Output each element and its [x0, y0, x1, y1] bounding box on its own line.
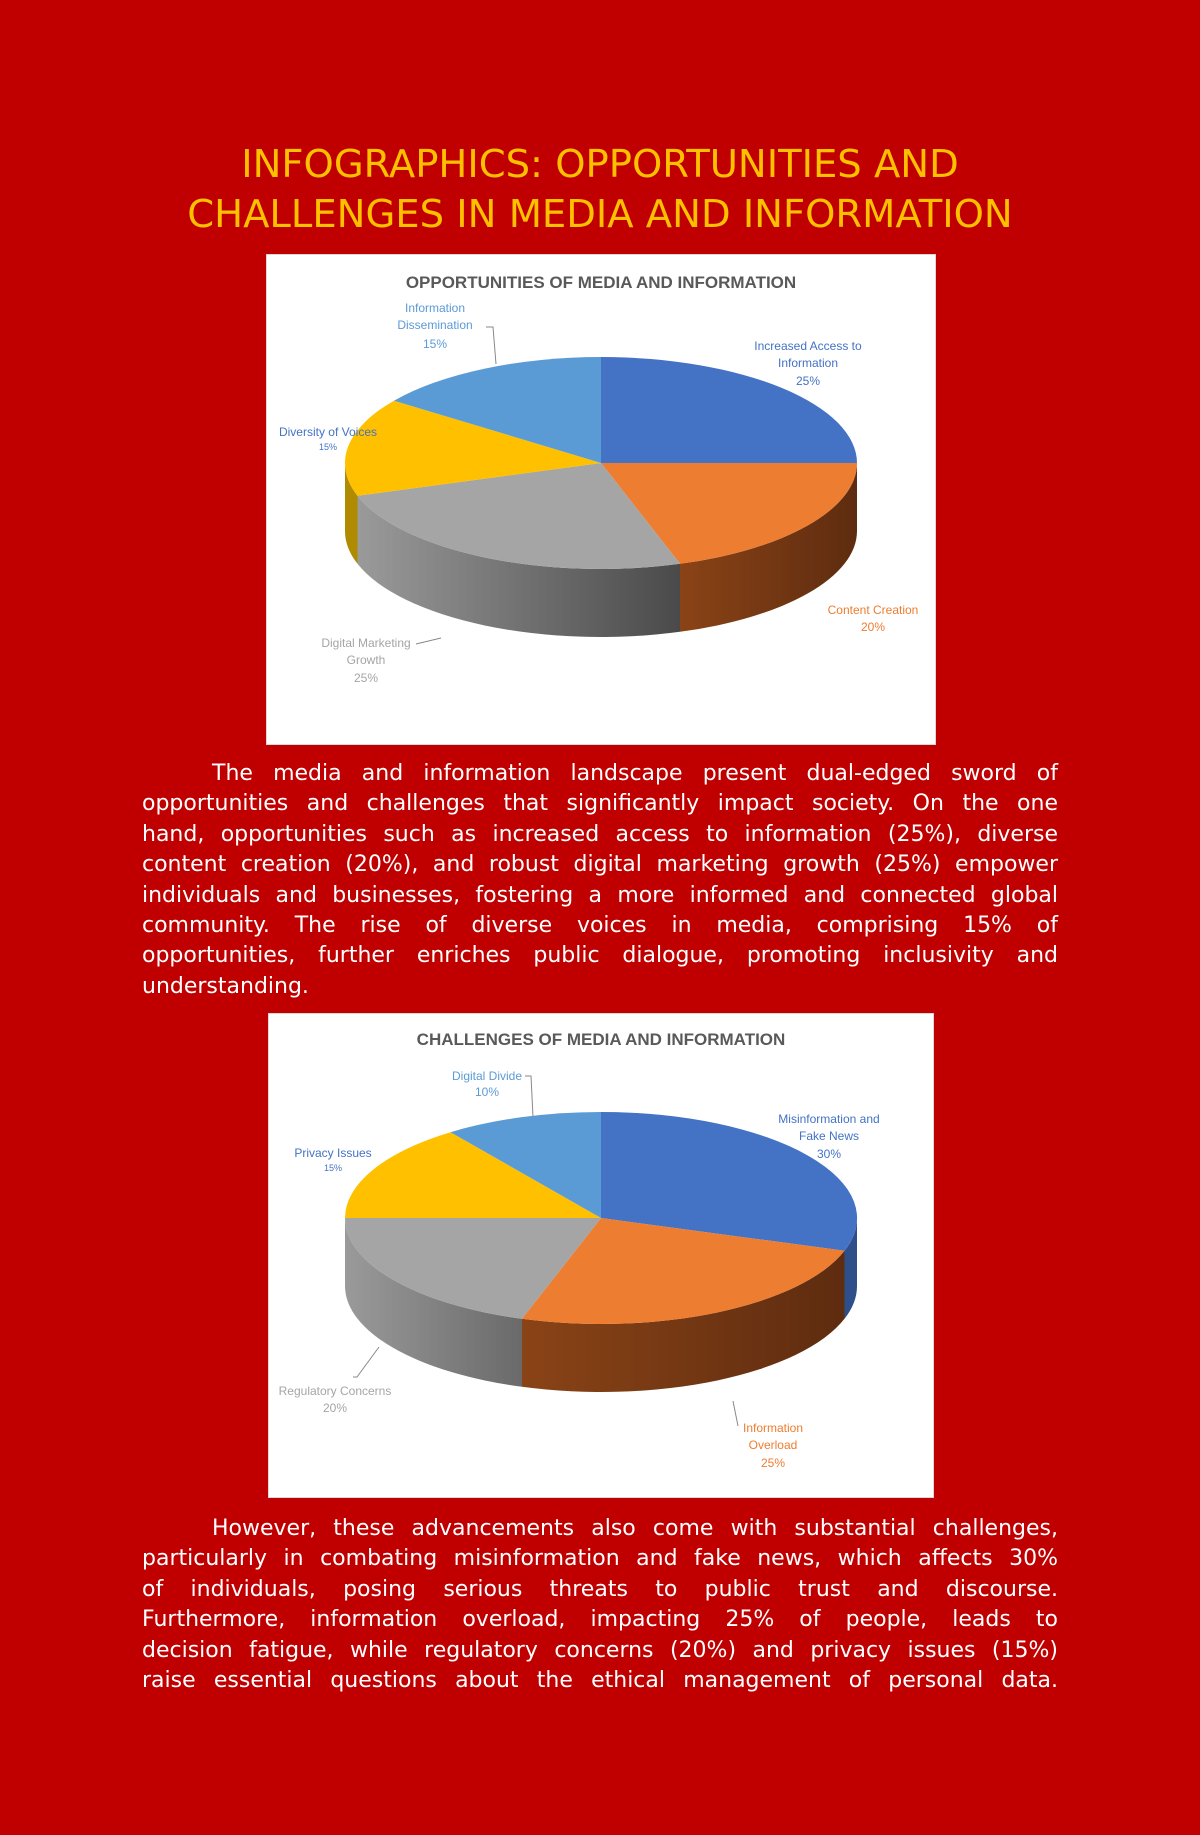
- pie slices: [345, 357, 857, 569]
- labels: Content Creation: [828, 603, 918, 617]
- labels: 20%: [861, 620, 885, 634]
- paragraph: opportunities: content creation (20%), and robust digital marketing growth (25%) empower: [142, 852, 1058, 877]
- labels: 15%: [319, 442, 337, 452]
- title: CHALLENGES IN MEDIA AND INFORMATION: [187, 192, 1013, 237]
- pie sides: [345, 463, 857, 637]
- labels: Diversity of Voices: [279, 425, 377, 439]
- labels: 30%: [817, 1147, 841, 1161]
- labels: Information: [405, 301, 465, 315]
- labels: Overload: [749, 1438, 797, 1452]
- labels: [279, 301, 918, 685]
- paragraph: challenges: However, these advancements also come with substantial challenges,: [212, 1516, 1058, 1541]
- labels: Privacy Issues: [294, 1146, 372, 1160]
- title: INFOGRAPHICS: OPPORTUNITIES AND: [241, 142, 959, 187]
- labels: [279, 1069, 880, 1470]
- labels: 25%: [761, 1456, 785, 1470]
- paragraph: opportunities: community. The rise of diverse voices in media, comprising 15% of: [142, 913, 1058, 938]
- labels: Regulatory Concerns: [279, 1384, 391, 1398]
- paragraph: opportunities: hand, opportunities such as increased access to information (25%), diverse: [142, 822, 1058, 847]
- labels: Information: [743, 1421, 803, 1435]
- chart title: CHALLENGES OF MEDIA AND INFORMATION: [417, 1030, 785, 1049]
- labels: 15%: [324, 1163, 342, 1173]
- labels: Dissemination: [397, 318, 473, 332]
- labels: Information: [778, 356, 838, 370]
- paragraph: opportunities: understanding.: [142, 974, 309, 999]
- chart: challenges pie: [268, 1013, 934, 1498]
- paragraph: opportunities: The media and information landscape present dual-edged sword of: [212, 761, 1058, 786]
- paragraph: challenges: [142, 1516, 1058, 1693]
- paragraph: challenges: particularly in combating misinformation and fake news, which affects 30%: [142, 1546, 1058, 1571]
- labels: Growth: [347, 653, 385, 667]
- paragraph: challenges: raise essential questions about the ethical management of personal data.: [142, 1668, 1058, 1693]
- chart title: OPPORTUNITIES OF MEDIA AND INFORMATION: [406, 273, 796, 292]
- paragraph: opportunities: opportunities and challenges that significantly impact society. On the one: [142, 791, 1058, 816]
- labels: Misinformation and: [778, 1112, 880, 1126]
- pie sides: [345, 1218, 857, 1392]
- chart: opportunities pie: [266, 254, 936, 745]
- paragraph: opportunities: individuals and businesses, fostering a more informed and connected global: [142, 883, 1058, 908]
- labels: Fake News: [799, 1129, 859, 1143]
- pie slices: [345, 1112, 857, 1324]
- paragraph: challenges: Furthermore, information overload, impacting 25% of people, leads to: [142, 1607, 1058, 1632]
- labels: 25%: [796, 374, 820, 388]
- labels: 25%: [354, 671, 378, 685]
- labels: Increased Access to: [754, 339, 862, 353]
- paragraph: opportunities: [142, 761, 1058, 999]
- paragraph: challenges: of individuals, posing serious threats to public trust and discourse.: [142, 1577, 1058, 1602]
- labels: Digital Marketing: [321, 636, 411, 650]
- title: [187, 142, 1013, 237]
- labels: 15%: [423, 337, 447, 351]
- paragraph: challenges: decision fatigue, while regulatory concerns (20%) and privacy issues (15%): [142, 1638, 1058, 1663]
- labels: 10%: [475, 1085, 499, 1099]
- labels: 20%: [323, 1401, 347, 1415]
- labels: Digital Divide: [452, 1069, 522, 1083]
- paragraph: opportunities: opportunities, further enriches public dialogue, promoting inclusivity and: [142, 943, 1058, 968]
